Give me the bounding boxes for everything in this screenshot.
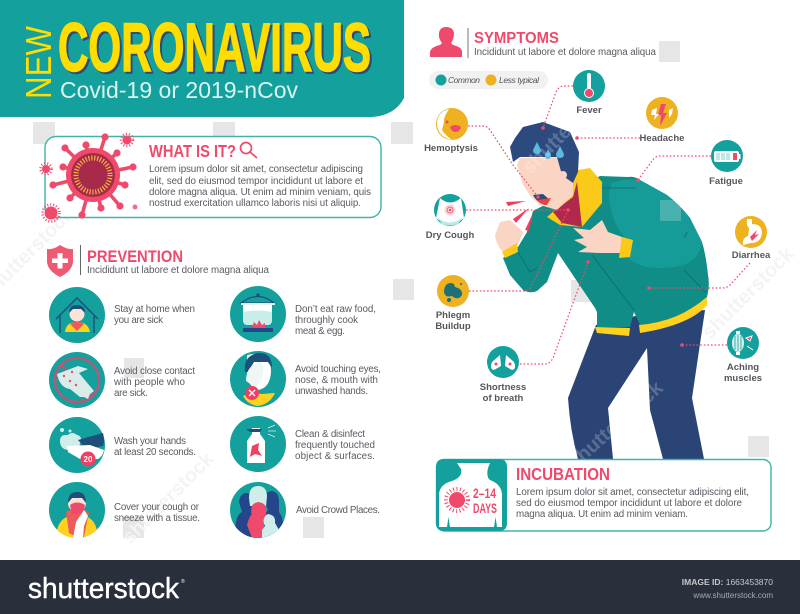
legend [429, 71, 548, 89]
figure: coughing man [495, 115, 709, 474]
mouth [533, 194, 550, 205]
prevention item: avoid close contact: are sick. [114, 388, 148, 399]
header banner [0, 0, 404, 117]
heading: symptoms: SYMPTOMS [474, 30, 559, 47]
text block: incubation body [516, 487, 749, 520]
prevention item: disinfect: Clean & disinfect [295, 429, 365, 440]
chest hand [573, 220, 622, 253]
heading: symptoms: Incididunt ut labore et dolore magna aliqua [474, 47, 657, 58]
footer registered mark: ® [181, 578, 185, 585]
figure: coughing man: shutter [518, 115, 582, 179]
prevention item: cooked food: Don’t eat raw food, [295, 304, 376, 315]
symptom: headache: Headache [640, 133, 684, 144]
symptom: dry cough [426, 194, 474, 241]
symptom: phlegm: Phlegm [436, 310, 470, 321]
icon: person [430, 27, 462, 57]
title: CORONAVIRUS [58, 9, 373, 88]
symptom: shortness of breath [480, 346, 526, 404]
text block: incubation body: magna aliqua. Ut enim ad minim veniam. [516, 509, 688, 520]
prevention item: cooked food: meat & egg. [295, 326, 345, 337]
heading: prevention: PREVENTION [87, 247, 183, 266]
prevention item: cooked food [230, 286, 376, 342]
prevention item: avoid close contact [49, 352, 195, 408]
heading: prevention [47, 245, 270, 277]
footer logo: shutterstock [28, 573, 179, 605]
icon: body silhouette [436, 459, 507, 531]
watermark squares [33, 41, 769, 538]
prevention item: stay at home [49, 287, 195, 343]
symptom: aching muscles: Aching [727, 362, 759, 373]
prevention item: stay at home: you are sick [114, 315, 163, 326]
prevention item: avoid crowds [230, 482, 380, 538]
heading: symptoms [430, 27, 657, 58]
prevention item: cover cough [49, 482, 200, 538]
prevention item: avoid touching face: nose, & mouth with [295, 375, 378, 386]
text block: what is it body: dolore magna aliqua. Ut enim ad minim veniam, quis [149, 187, 371, 198]
symptom: fever [573, 70, 605, 116]
heading: what is it: WHAT IS IT? [149, 141, 236, 161]
watermark text on white [0, 202, 799, 549]
sweat drops [533, 142, 564, 159]
text block: incubation body: Lorem ipsum dolor sit amet, consectetur adipiscing elit, [516, 487, 749, 498]
symptom: fatigue: Fatigue [709, 176, 743, 187]
fist [495, 220, 523, 252]
prevention item: avoid close contact: with people who [113, 377, 186, 388]
prevention item: disinfect: frequently touched [295, 440, 375, 451]
prevention item: stay at home: Stay at home when [114, 304, 195, 315]
watermark text on white: shutterstock [698, 242, 799, 344]
prevention item: disinfect [230, 416, 375, 472]
panel: what is it [40, 133, 381, 222]
footer url: www.shutterstock.com [692, 591, 773, 600]
prevention item: disinfect: object & surfaces. [295, 451, 375, 462]
title: NEW: NEW [18, 26, 59, 99]
symptom: dry cough: Dry Cough [426, 230, 474, 241]
jacket hem [595, 327, 630, 336]
watermark on figure [660, 200, 681, 221]
symptom: shortness of breath: of breath [483, 393, 524, 404]
symptom: fever: Fever [576, 105, 602, 116]
icon: body silhouette: 2–14 [473, 485, 496, 501]
scarf [553, 182, 582, 227]
symptom: hemoptysis [424, 108, 478, 154]
prevention item: avoid touching face [230, 351, 381, 407]
footer bar [0, 560, 800, 614]
prevention item: wash hands: 20 [84, 455, 93, 464]
symptom: fatigue [709, 140, 743, 187]
cough spray [506, 201, 533, 231]
figure: coughing man: shutterstock [564, 376, 668, 474]
connector dotted lines [466, 86, 750, 364]
symptom: phlegm [435, 275, 471, 332]
prevention item: wash hands: at least 20 seconds. [114, 447, 196, 458]
face [517, 157, 573, 210]
symptom: headache [640, 97, 684, 144]
symptom: diarrhea: Diarrhea [732, 250, 771, 261]
prevention item: cover cough: sneeze with a tissue. [114, 513, 200, 524]
symptom: aching muscles [724, 327, 762, 384]
heading: prevention: Incididunt ut labore et dolore magna aliqua [87, 265, 270, 276]
text block: what is it body: nostrud exercitation ullamco laboris nisi ut aliquip. [149, 198, 361, 209]
hair [510, 122, 579, 183]
symptom: shortness of breath: Shortness [480, 382, 526, 393]
text block: what is it body: elit, sed do eiusmod tempor incididunt ut labore et [149, 176, 363, 187]
icon: body silhouette: DAYS [473, 500, 497, 516]
watermark text on white: shutterstock [118, 447, 219, 549]
icon: virus [40, 133, 138, 222]
prevention item: avoid close contact: Avoid close contact [114, 366, 195, 377]
footer image id: IMAGE ID: 1663453870 [682, 577, 773, 587]
text block: what is it body: Lorem ipsum dolor sit amet, consectetur adipiscing [149, 164, 363, 175]
icon: magnifier [240, 142, 257, 158]
jacket back panel [609, 179, 702, 268]
collar [547, 168, 602, 227]
legend: Common [448, 75, 480, 85]
jacket [503, 176, 709, 327]
text block: incubation body: sed do eiusmod tempor incididunt ut labore et dolore [516, 498, 743, 509]
trousers [568, 310, 705, 459]
icon: shield [47, 245, 73, 277]
prevention item: cooked food: throughly cook [295, 315, 358, 326]
legend: Less typical [499, 75, 540, 85]
symptom: aching muscles: muscles [724, 373, 762, 384]
subtitle: Covid-19 or 2019-nCov [60, 77, 298, 103]
prevention item: avoid crowds: Avoid Crowd Places. [296, 505, 380, 516]
prevention item: wash hands: Wash your hands [114, 436, 186, 447]
heading: incubation: INCUBATION [516, 464, 610, 484]
prevention item: avoid touching face: Avoid touching eyes, [295, 364, 381, 375]
symptom: diarrhea [732, 216, 771, 261]
prevention item: cover cough: Cover your cough or [114, 502, 200, 513]
text block: what is it body [149, 164, 371, 209]
symptom: hemoptysis: Hemoptysis [424, 143, 478, 154]
symptom: phlegm: Buildup [435, 321, 471, 332]
panel: incubation [436, 459, 771, 531]
title: CORONAVIRUS: CORONAVIRUS [60, 11, 373, 88]
prevention item: wash hands [49, 417, 196, 473]
prevention item: avoid touching face: unwashed hands. [295, 386, 368, 397]
title: CORONAVIRUS: CORONAVIRUS [58, 9, 371, 86]
